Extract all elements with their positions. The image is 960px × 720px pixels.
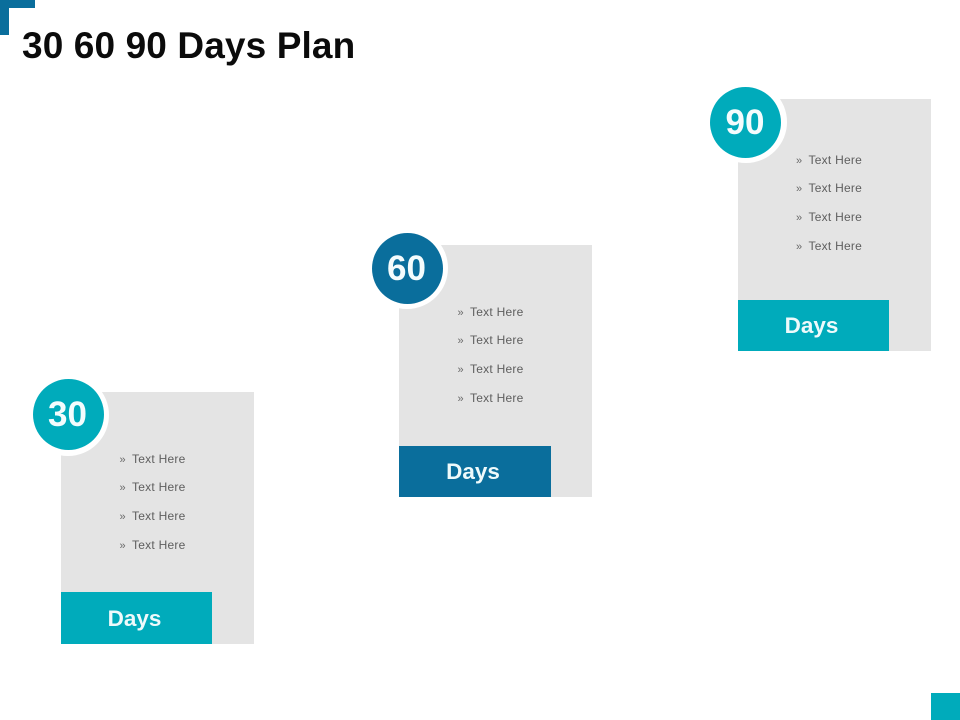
text list: » [458,307,464,319]
text list: Text Here [470,305,524,319]
text list: Text Here [470,362,524,376]
text list: Text Here [470,391,524,405]
days band: Days [108,606,161,631]
card background [399,245,592,497]
days band [399,446,551,497]
panel: 30 days [33,379,254,644]
title: 30 60 90 Days Plan [22,25,355,66]
text list [796,153,862,253]
text list: Text Here [808,210,862,224]
text list [458,305,524,405]
text list: » [120,540,126,552]
text list: Text Here [132,452,186,466]
text list: Text Here [470,333,524,347]
text list: Text Here [808,153,862,167]
number badge: 90 [704,81,786,163]
text list: » [458,335,464,347]
text list: Text Here [808,239,862,253]
text list: » [120,482,126,494]
card background [738,99,931,351]
text list: Text Here [808,181,862,195]
text list: » [796,241,802,253]
corner accent: top left [0,0,35,35]
corner accent: bottom right [931,693,960,720]
text list: Text Here [132,538,186,552]
number badge: 30 [27,374,109,456]
number badge: 90: 90 [726,102,764,142]
panel: 60 days [372,233,592,497]
days band: Days [785,313,838,338]
days band [61,592,212,644]
days band: Days [446,459,500,484]
number badge: 30: 30 [48,395,87,434]
text list: » [120,511,126,523]
days band [738,300,889,351]
text list: » [458,393,464,405]
number badge: 60 [366,227,448,309]
text list: » [796,212,802,224]
text list [120,452,186,552]
text list: » [120,454,126,466]
card background [61,392,254,644]
text list: Text Here [132,509,186,523]
text list: » [458,364,464,376]
number badge: 60: 60 [387,248,426,288]
text list: » [796,155,802,167]
text list: Text Here [132,480,186,494]
panel: 90 days [710,87,931,351]
text list: » [796,183,802,195]
